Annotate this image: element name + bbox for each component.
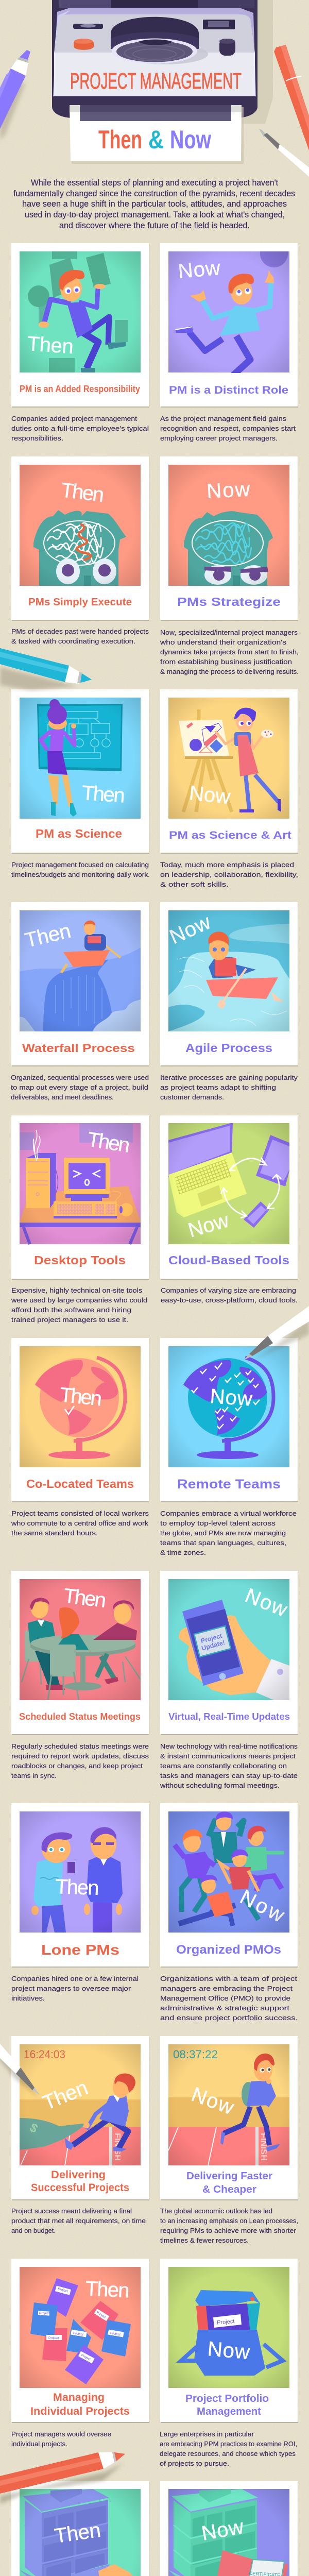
row 1 then description: responsibilities.: [11, 434, 63, 442]
photo: running light now: FINISH: [259, 2133, 268, 2161]
row 3 now description: on leadership, collaboration, flexibility,: [160, 871, 298, 878]
photo: dragging bag then: FINISH: [113, 2133, 122, 2161]
row 2 then description: PMs of decades past were handed projects: [11, 628, 149, 635]
row 3 then description: [11, 861, 150, 878]
photo: globe now: [168, 1346, 289, 1467]
row 2 then description: & tasked with coordinating execution.: [11, 637, 135, 645]
row 7 then description: Regularly scheduled status meetings were: [11, 1742, 149, 1750]
card title: Project Portfolio: [185, 2393, 269, 2404]
photo: whiteboard then: [20, 698, 141, 819]
row 6 then card: [11, 1338, 149, 1502]
row 1 then description: Companies added project management: [11, 415, 137, 422]
intro text: have seen a huge shift in the particular tools, attitudes, and approaches: [22, 199, 287, 209]
row 4 then description: [11, 1074, 149, 1101]
row 11 then card: [11, 2481, 149, 2576]
card title: Cloud-Based Tools: [168, 1253, 289, 1267]
row 1 then description: duties onto a full-time employee's typical: [11, 425, 149, 432]
row 5 then description: were used by large companies who could: [11, 1296, 147, 1304]
row 8 now description: [160, 1975, 298, 2022]
card title: & Cheaper: [202, 2184, 256, 2195]
row 1 now description: [160, 415, 296, 442]
row 6 then description: Project teams consisted of local workers: [11, 1510, 149, 1517]
row 3 then description: Project management focused on calculating: [11, 861, 149, 869]
card title: PMs Simply Execute: [28, 597, 132, 608]
row 10 now description: Large enterprises in particular: [160, 2430, 254, 2438]
photo: desktop computer then: Then: [86, 1128, 131, 1157]
row 9 now description: timelines & fewer resources.: [160, 2236, 249, 2244]
pen: white top right: [259, 129, 309, 177]
row 3 now card: [160, 689, 298, 854]
row 10 then description: [11, 2430, 111, 2448]
camera illustration: [52, 0, 273, 124]
photo: scattered notebooks then: Project: [39, 2312, 49, 2315]
row 2 now description: dynamics take projects from start to finish,: [160, 648, 299, 656]
photo: phone update now: Now: [242, 1584, 290, 1621]
card title: Co-Located Teams: [26, 1477, 134, 1490]
row 4 then card: [11, 902, 149, 1066]
row 5 then description: [11, 1286, 147, 1324]
photo: desktop computer then: [20, 1123, 141, 1244]
intro text: used in day-to-day project management. Take a look at what's changed,: [25, 210, 285, 219]
pen: white row 5: [244, 1306, 309, 1360]
row 3 now description: Today, much more emphasis is placed: [160, 861, 294, 869]
row 1 then description: [11, 415, 149, 442]
card title: PM as Science & Art: [169, 829, 291, 841]
photo: dragging bag then: $: [27, 2121, 40, 2136]
row 1 now description: recognition and respect, companies start: [160, 425, 296, 432]
row 2 then description: [11, 628, 149, 645]
photo: painter now: Now: [188, 782, 231, 808]
card title: Waterfall Process: [22, 1042, 135, 1055]
row 4 now description: customer demands.: [160, 1093, 224, 1101]
photo: painter now: [168, 698, 289, 819]
row 8 then description: [11, 1975, 139, 2002]
row 1 now description: As the project management field gains: [160, 415, 287, 422]
row 7 now description: teams are constantly collaborating on: [160, 1762, 287, 1770]
row 1 then card: [11, 243, 149, 408]
photo: phone update now: [168, 1579, 290, 1700]
photo: scattered notebooks then: [20, 2267, 141, 2388]
pen: red top right: [274, 45, 309, 150]
photo: brain then: Then: [60, 479, 106, 506]
photo: building and certificate now: Now: [200, 2515, 245, 2545]
card title: PMs Strategize: [177, 595, 281, 608]
photo: scattered notebooks then: Project: [57, 2287, 68, 2294]
row 7 now description: tasks and managers can stay up-to-date: [160, 1772, 298, 1780]
subtitle: [98, 125, 211, 154]
subtitle: Then: [98, 125, 142, 154]
row 10 now card: [160, 2259, 298, 2423]
row 6 now description: [160, 1510, 297, 1556]
card title: Lone PMs: [41, 1942, 119, 1958]
row 8 then description: project managers to oversee major: [11, 1985, 131, 1992]
photo: brain then: [20, 465, 141, 586]
row 9 now card: [160, 2036, 298, 2200]
row 7 now description: [160, 1742, 298, 1789]
row 7 now description: New technology with real-time notifications: [160, 1742, 298, 1750]
row 10 now description: are embracing PPM practices to examine ROI,: [160, 2440, 297, 2448]
row 8 then description: Companies hired one or a few internal: [11, 1975, 139, 1982]
intro text: While the essential steps of planning and executing a project haven't: [31, 178, 278, 188]
row 9 then description: and on budget.: [11, 2227, 56, 2234]
row 6 then description: who commute to a central office and work: [11, 1519, 149, 1527]
photo: status meeting then: Then: [62, 1584, 108, 1612]
photo: waterfall then: Then: [23, 920, 73, 952]
photo: running light now: 08:37:22: [173, 2048, 218, 2061]
card title: PM is a Distinct Role: [169, 384, 288, 396]
row 3 then description: timelines/budgets and monitoring daily work.: [11, 871, 150, 878]
photo: organized team now: [168, 1811, 289, 1933]
row 10 then card: [11, 2259, 149, 2423]
row 5 then description: Expensive, highly technical on-site tools: [11, 1286, 143, 1294]
photo: scattered notebooks then: Project: [48, 2336, 59, 2340]
card title: [186, 2171, 272, 2195]
photo: juggling shapes then: Then: [26, 332, 74, 358]
pen: blue row 2: [0, 648, 92, 690]
row 2 now description: who understand their organization's: [160, 638, 287, 646]
photo: lone PMs then: Then: [55, 1875, 99, 1900]
photo: lone PMs then: [20, 1811, 141, 1933]
card title: [31, 2169, 129, 2194]
photo: dragging bag then: [20, 2044, 141, 2165]
intro text: and discover where the future of the field is headed.: [59, 221, 250, 230]
row 9 then description: Project success meant delivering a final: [11, 2207, 132, 2215]
row 6 then description: the same standard hours.: [11, 1529, 98, 1537]
row 7 then card: [11, 1571, 149, 1735]
subtitle: &: [148, 125, 164, 154]
photo: scattered notebooks then: Project: [80, 2353, 91, 2362]
card title: Delivering: [51, 2169, 106, 2181]
row 6 now description: to employ top-level talent across: [160, 1519, 276, 1527]
instant photo with Then & Now subtitle: [70, 105, 244, 164]
row 2 now description: Now, specialized/internal project managers: [160, 629, 298, 636]
row 4 now description: as project teams adapt to shifting: [160, 1083, 276, 1091]
card title: Remote Teams: [177, 1477, 281, 1492]
row 5 then description: trained project managers to use it.: [11, 1316, 128, 1324]
row 10 then description: individual projects.: [11, 2440, 67, 2448]
row 10 now description: of projects to pursue.: [160, 2460, 229, 2467]
card title: Virtual, Real-Time Updates: [168, 1711, 290, 1722]
row 10 now description: delegate resources, and choose which types: [160, 2450, 296, 2458]
photo: running light now: Now: [188, 2083, 237, 2119]
row 8 now description: and ensure project portfolio success.: [160, 2014, 298, 2022]
row 11 now card: [160, 2481, 298, 2576]
row 7 now card: [160, 1571, 298, 1735]
photo: dragging bag then: 16:24:03: [24, 2048, 65, 2061]
row 8 now description: Organizations with a team of project: [160, 1975, 297, 1982]
photo: scattered notebooks then: Then: [85, 2277, 130, 2302]
row 8 now description: Management Office (PMO) to provide: [160, 1994, 290, 2002]
subtitle: Now: [170, 125, 211, 154]
photo: agile river now: [166, 910, 289, 1031]
photo: cloud devices now: Now: [185, 1209, 231, 1242]
card title: Managing: [53, 2392, 105, 2403]
card title: Successful Projects: [31, 2182, 129, 2194]
row 5 now description: [161, 1286, 298, 1304]
row 7 then description: [11, 1742, 149, 1780]
photo: phone update now: Update!: [201, 1639, 226, 1652]
card title: PM is an Added Responsibility: [20, 384, 140, 394]
row 8 then description: initiatives.: [11, 1994, 45, 2002]
row 4 now description: [160, 1074, 298, 1101]
pen: red row 10: [0, 2452, 125, 2504]
row 5 now description: Companies of varying size are embracing: [161, 1286, 296, 1294]
row 4 then description: deliverables, and meet deadlines.: [11, 1093, 114, 1101]
row 7 now description: without scheduling formal meetings.: [160, 1782, 280, 1789]
card title: PM as Science: [36, 827, 122, 840]
photo: balancing now: [168, 251, 289, 373]
card title: Agile Process: [185, 1041, 272, 1055]
row 7 then description: roadblocks or changes, and keep project: [11, 1762, 143, 1770]
row 3 then card: [11, 689, 149, 854]
row 10 now description: [160, 2430, 297, 2467]
row 5 now card: [160, 1115, 298, 1280]
photo: scattered notebooks then: Project: [96, 2311, 107, 2319]
row 7 now description: & instant communications means project: [160, 1752, 296, 1760]
photo: globe then: [20, 1346, 141, 1467]
row 4 then description: Organized, sequential processes were used: [11, 1074, 149, 1081]
row 10 then description: Project managers would oversee: [11, 2430, 111, 2438]
intro text: [13, 178, 295, 230]
photo: status meeting then: [20, 1579, 141, 1700]
row 4 then description: to map out every stage of a project, build: [11, 1083, 148, 1091]
photo: building and certificate now: [168, 2489, 289, 2576]
row 4 now description: Iterative processes are gaining popularity: [160, 1074, 298, 1081]
row 8 then card: [11, 1803, 149, 1968]
row 2 now description: [160, 629, 299, 675]
row 9 then description: [11, 2207, 146, 2234]
photo: juggling shapes then: [20, 251, 141, 372]
row 2 now description: from establishing business justification: [160, 658, 292, 666]
row 6 now description: Companies embrace a virtual workforce: [160, 1510, 297, 1517]
row 8 now description: administrative & strategic support: [160, 2004, 289, 2012]
photo: waterfall then: [20, 910, 141, 1031]
card title: Scheduled Status Meetings: [19, 1711, 141, 1722]
photo: dragging bag then: Then: [40, 2076, 91, 2114]
row 8 now card: [160, 1803, 298, 1968]
row 2 then card: [11, 456, 149, 621]
photo: bag of portfolios now: Now: [207, 2337, 251, 2364]
photo: globe then: Then: [59, 1383, 103, 1411]
photo: bag of portfolios now: [168, 2267, 289, 2388]
row 4 now card: [160, 902, 298, 1066]
card title: Desktop Tools: [34, 1253, 126, 1267]
card title: Individual Projects: [30, 2405, 130, 2417]
photo: bag of portfolios now: Project: [217, 2318, 235, 2326]
card title: Management: [197, 2406, 261, 2417]
row 5 then description: afford both the software and hiring: [11, 1306, 131, 1314]
row 6 now description: teams that span languages, cultures,: [160, 1539, 286, 1547]
photo: phone update now: Project: [200, 1632, 224, 1645]
row 7 then description: teams in sync.: [11, 1772, 57, 1780]
row 5 now description: easy-to-use, cross-platform, cloud tools.: [161, 1296, 298, 1304]
row 5 then card: [11, 1115, 149, 1280]
photo: scattered notebooks then: Project: [110, 2331, 121, 2337]
row 9 now description: requiring PMs to achieve more with shorter: [160, 2227, 297, 2234]
photo: balancing now: Now: [177, 257, 221, 283]
row 9 now description: [160, 2207, 298, 2244]
photo: globe now: Now: [209, 1385, 253, 1411]
card title: [30, 2392, 130, 2417]
photo: brain now: [168, 465, 289, 586]
row 9 then description: product that met all requirements, on time: [11, 2217, 146, 2225]
photo: running light now: [168, 2044, 289, 2165]
row 9 then card: [11, 2036, 149, 2200]
photo: scattered notebooks then: Project: [73, 2331, 84, 2337]
pen: purple top left: [0, 50, 30, 140]
row 2 now card: [160, 456, 298, 621]
photo: whiteboard then: Then: [81, 782, 126, 807]
card title: Organized PMOs: [176, 1943, 281, 1957]
photo: agile river now: Now: [166, 911, 214, 948]
row 2 now description: & managing the process to delivering results.: [160, 668, 299, 675]
row 3 now description: & other soft skills.: [160, 880, 229, 888]
photo: building model then: Then: [53, 2519, 102, 2548]
card title: Delivering Faster: [186, 2171, 272, 2182]
row 9 now description: to an increasing emphasis on Lean processes,: [160, 2217, 298, 2225]
row 6 now description: the globe, and PMs are now managing: [160, 1529, 286, 1537]
row 8 now description: managers are embracing the Project: [160, 1985, 293, 1992]
photo: building model then: [20, 2489, 141, 2576]
row 1 now card: [160, 240, 298, 408]
photo: cloud devices now: [168, 1123, 289, 1244]
row 6 then description: [11, 1510, 149, 1537]
intro text: fundamentally changed since the construction of the pyramids, recent decades: [13, 189, 295, 198]
row 1 now description: employing career project managers.: [160, 434, 278, 442]
photo: brain now: Now: [206, 478, 250, 503]
row 6 now card: [160, 1338, 298, 1502]
row 9 now description: The global economic outlook has led: [160, 2207, 272, 2215]
row 3 now description: [160, 861, 298, 888]
pen: white row 8: [0, 2044, 40, 2098]
row 7 then description: required to report work updates, discuss: [11, 1752, 149, 1760]
card title: [185, 2393, 269, 2417]
photo: organized team now: Now: [236, 1886, 288, 1927]
row 6 now description: & time zones.: [160, 1549, 206, 1556]
